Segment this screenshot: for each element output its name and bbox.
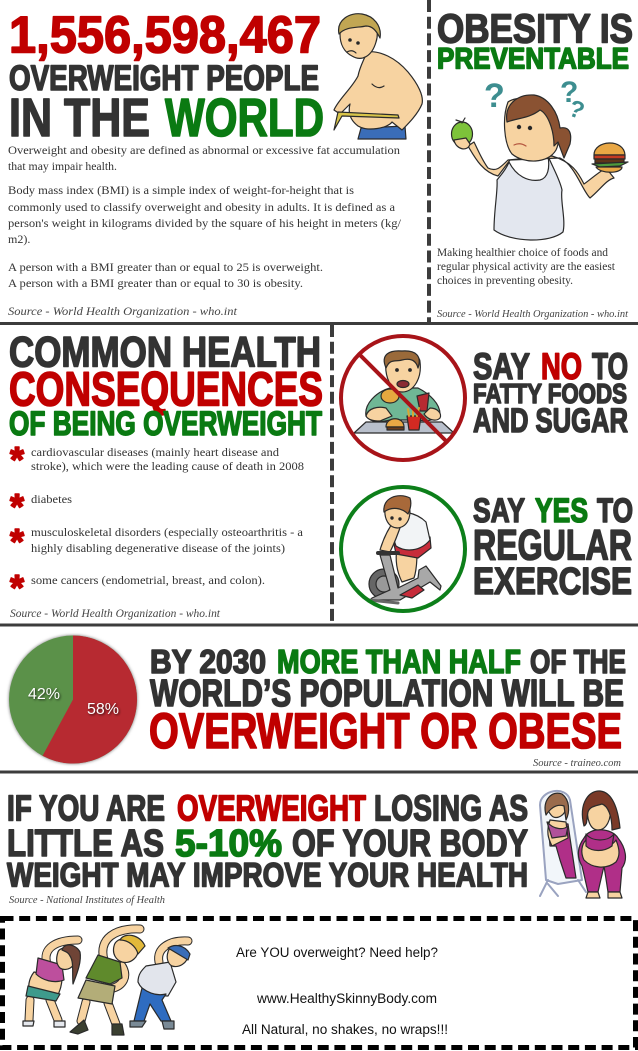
panel: obesity is preventable: [437, 6, 633, 320]
heading: little as 5-10% of your body: LITTLE AS: [7, 823, 164, 865]
panel: call to action: [2, 918, 636, 1048]
list: health consequences: diabetes: [31, 492, 72, 506]
text block: definition of obesity: A person with a BMI greater than or equal to 30 is obesity.: [8, 276, 303, 290]
panel: common health consequences: [9, 328, 323, 620]
heading: say no to: [473, 346, 628, 387]
list: health consequences: *: [10, 486, 24, 527]
panel: say no to fatty foods: [341, 336, 628, 460]
list: health consequences: [10, 439, 304, 608]
panel: overweight people in the world: [8, 6, 422, 318]
text block: definition of obesity: that may impair health.: [8, 159, 117, 173]
panel: say yes to regular exercise: [341, 487, 633, 611]
list: health consequences: *: [10, 567, 24, 608]
text block: definition of obesity: person's weight in kilograms divided by the square of his height in meters (kg/: [8, 216, 402, 230]
panel: 2030 projection: [9, 635, 626, 769]
text: website: www.HealthySkinnyBody.com: [256, 991, 437, 1006]
icon: woman choosing apple or burger: ?: [484, 77, 505, 115]
list: health consequences: cardiovascular diseases (mainly heart disease and: [31, 445, 279, 459]
title: overweight count: 1,556,598,467: [9, 6, 321, 64]
text block: healthier choices: [437, 245, 616, 287]
heading: by 2030 more than half of the: MORE THAN HALF: [277, 643, 521, 680]
icon: three people stretching: [23, 929, 190, 1035]
source: WHO: Source - World Health Organization - who.int: [10, 606, 221, 620]
pie chart: 58% and 42%: 42%: [28, 686, 60, 703]
list: health consequences: *: [10, 439, 24, 480]
heading: consequences: CONSEQUENCES: [9, 364, 323, 416]
list: health consequences: musculoskeletal disorders (especially osteoarthritis - a: [31, 525, 304, 539]
icon: prohibited fast food: [341, 336, 465, 460]
text block: healthier choices: regular physical activity are the easiest: [437, 259, 616, 273]
text block: definition of obesity: A person with a BMI greater than or equal to 25 is overweight.: [8, 260, 323, 274]
source: WHO: Source - World Health Organization - who.int: [437, 308, 629, 320]
icon: overweight man measuring waist: [334, 14, 422, 139]
heading: common health: COMMON HEALTH: [9, 328, 321, 376]
heading: by 2030 more than half of the: [150, 643, 626, 680]
heading: if you are overweight losing as: IF YOU ARE: [7, 788, 165, 828]
heading: say yes to: [473, 492, 633, 530]
heading: weight may improve your health: WEIGHT MAY IMPROVE YOUR HEALTH: [7, 856, 528, 894]
heading: little as 5-10% of your body: 5-10%: [175, 823, 282, 865]
icon: woman choosing apple or burger: ?: [565, 95, 588, 125]
heading: of being overweight: OF BEING OVERWEIGHT: [9, 405, 322, 443]
text: all natural promise: All Natural, no shakes, no wraps!!!: [242, 1022, 448, 1037]
text block: healthier choices: choices in preventing obesity.: [437, 273, 573, 287]
text block: definition of obesity: commonly used to classify overweight and obesity in adults. It is defined as a: [8, 200, 396, 214]
heading: by 2030 more than half of the: BY 2030: [150, 643, 266, 680]
heading: say yes to: YES: [535, 492, 588, 530]
icon: man on exercise bike: [341, 487, 465, 611]
text block: definition of obesity: Overweight and obesity are defined as abnormal or excessive fat accumulation: [8, 143, 400, 157]
source: National Institutes of Health: Source - National Institutes of Health: [9, 894, 165, 906]
heading: say no to: SAY: [473, 346, 530, 387]
list: health consequences: *: [10, 521, 24, 562]
text block: definition of obesity: [8, 143, 402, 290]
text block: definition of obesity: Body mass index (BMI) is a simple index of weight-for-height that is: [8, 183, 354, 197]
pie chart: 58% and 42%: [9, 635, 137, 764]
text block: healthier choices: Making healthier choice of foods and: [437, 245, 608, 259]
heading: little as 5-10% of your body: OF YOUR BODY: [292, 823, 528, 865]
heading: in the world: WORLD: [165, 88, 324, 148]
pie chart: 58% and 42%: 58%: [87, 701, 119, 718]
heading: in the world: [9, 88, 324, 148]
list: health consequences: stroke), which were the leading cause of death in 2008: [31, 459, 304, 473]
list: health consequences: highly disabling degenerative disease of the joints): [31, 541, 285, 555]
panel: losing weight improves health: [7, 788, 625, 906]
heading: overweight people: OVERWEIGHT PEOPLE: [9, 59, 319, 98]
text: call to action question: Are YOU overweight? Need help?: [236, 945, 438, 960]
text block: definition of obesity: m2).: [8, 232, 30, 246]
heading: little as 5-10% of your body: [7, 823, 528, 865]
heading: if you are overweight losing as: OVERWEIGHT: [177, 788, 366, 828]
heading: say no to: NO: [541, 346, 582, 387]
heading: in the world: IN THE: [9, 88, 150, 148]
icon: woman choosing apple or burger: ?: [560, 76, 578, 109]
icon: woman at mirror: [540, 791, 625, 898]
source: WHO: Source - World Health Organization - who.int: [8, 304, 238, 318]
heading: if you are overweight losing as: LOSING AS: [374, 788, 528, 828]
list: health consequences: some cancers (endometrial, breast, and colon).: [31, 573, 265, 587]
icon: woman choosing apple or burger: [452, 76, 628, 240]
source: traineo: Source - traineo.com: [533, 757, 621, 769]
heading: say yes to: SAY: [473, 492, 525, 530]
heading: if you are overweight losing as: [7, 788, 528, 828]
